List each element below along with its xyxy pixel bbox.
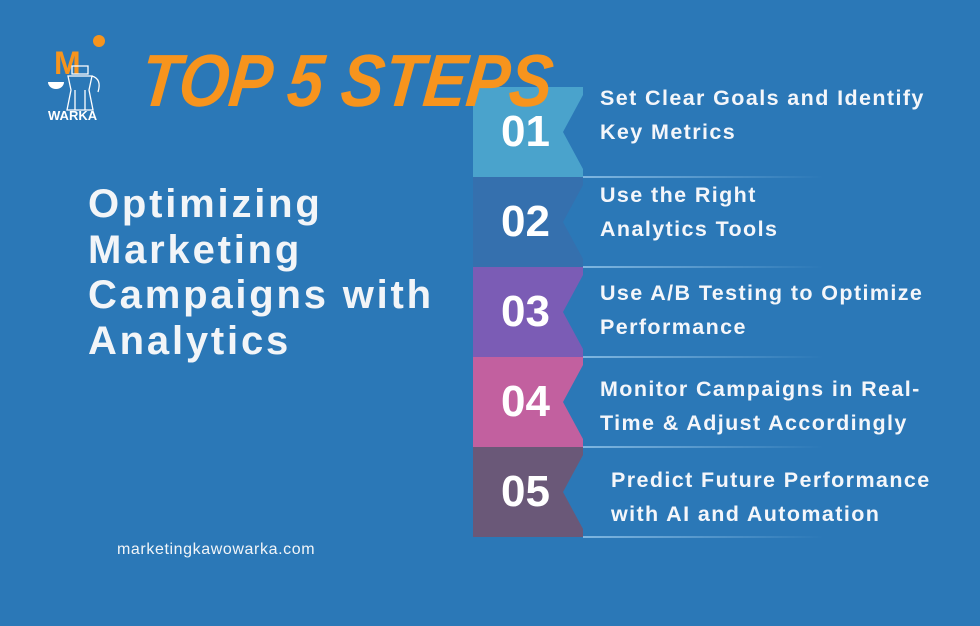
step texts: Set Clear Goals and Identify	[600, 86, 925, 110]
subtitle heading: Marketing	[88, 228, 302, 272]
text: 02	[501, 197, 550, 246]
steps graphic	[473, 87, 800, 538]
step texts	[600, 86, 925, 144]
text: Use A/B Testing to Optimize	[600, 281, 923, 305]
subtitle heading	[88, 182, 434, 362]
logo: M	[54, 45, 81, 81]
text: with AI and Automation	[611, 502, 880, 526]
text: Performance	[600, 315, 747, 339]
logo	[48, 35, 105, 122]
text: 04	[501, 377, 550, 426]
subtitle heading: Optimizing	[88, 182, 323, 226]
text: Predict Future Performance	[611, 468, 931, 492]
subtitle heading: Analytics	[88, 318, 291, 362]
text: Monitor Campaigns in Real-	[600, 377, 921, 401]
text: Use the Right	[600, 183, 757, 207]
text: Analytics Tools	[600, 217, 778, 241]
text: Time & Adjust Accordingly	[600, 411, 908, 435]
subtitle heading: Campaigns with	[88, 273, 434, 317]
title: TOP 5 STEPS: TOP 5 STEPS	[137, 39, 557, 122]
step numbers: 01	[501, 107, 550, 156]
text: 03	[501, 287, 550, 336]
text: 05	[501, 467, 550, 516]
website url: marketingkawowarka.com	[117, 541, 315, 558]
step texts: Key Metrics	[600, 120, 736, 144]
